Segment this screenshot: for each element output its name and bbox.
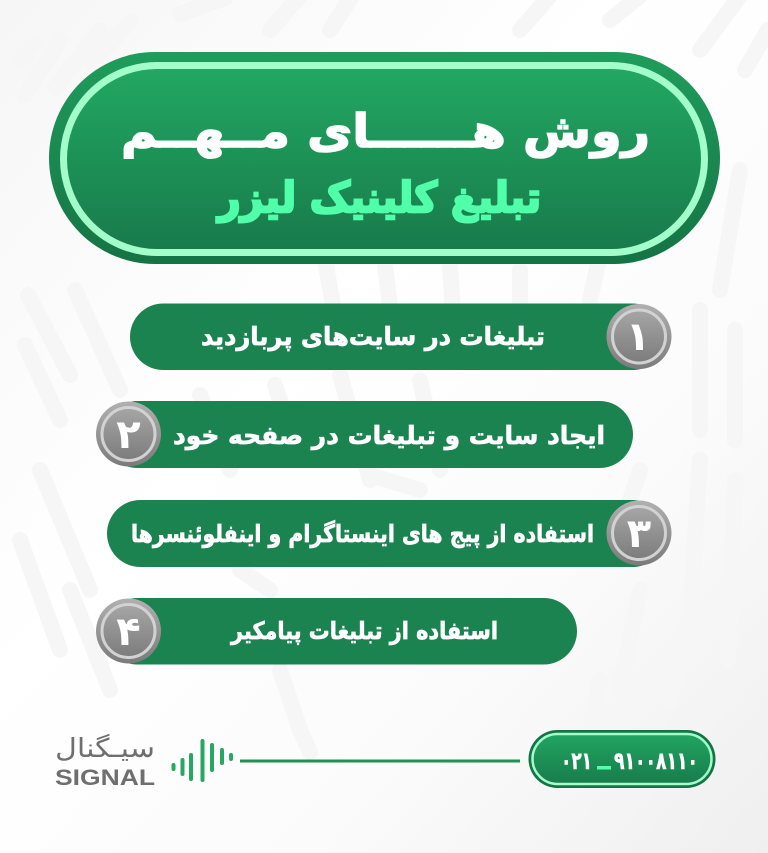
number badge 3	[606, 500, 672, 566]
icon: sound waveform	[174, 741, 231, 780]
item 1: تبلیغات در سایت‌های پربازدید	[201, 322, 545, 352]
number badge 1: ۱	[626, 314, 650, 360]
title line 2: تبلیغ کلینیک لیزر	[216, 173, 541, 223]
number badge 3: ۳	[627, 511, 651, 557]
phone area code: ۰۲۱	[561, 747, 592, 775]
logo latin wordmark: SIGNAL	[55, 765, 155, 790]
item 2	[96, 401, 633, 468]
connector line	[240, 760, 520, 762]
number badge 2	[96, 402, 161, 466]
number badge 4: ۴	[116, 609, 141, 655]
item 4	[96, 598, 577, 664]
item 1	[130, 304, 672, 370]
phone dash	[597, 766, 611, 770]
title line 1: روش هــــــای مــهــم	[121, 104, 650, 158]
number badge 4	[96, 598, 161, 664]
item 4: استفاده از تبلیغات پیامکیر	[230, 617, 498, 645]
phone number pill	[528, 730, 716, 788]
title banner	[49, 52, 720, 264]
number badge 1	[606, 304, 672, 369]
number badge 2: ۲	[116, 412, 141, 458]
logo persian wordmark: سیـگنال	[55, 733, 155, 764]
item 3: استفاده از پیج های اینستاگرام و اینفلوئنسرها	[131, 520, 594, 548]
item 3	[107, 500, 672, 567]
phone local number: ۹۱۰۰۸۱۱۰	[614, 747, 698, 775]
list of methods	[96, 304, 672, 664]
item 2: ایجاد سایت و تبلیغات در صفحه خود	[173, 421, 605, 451]
brand logo	[55, 733, 231, 790]
